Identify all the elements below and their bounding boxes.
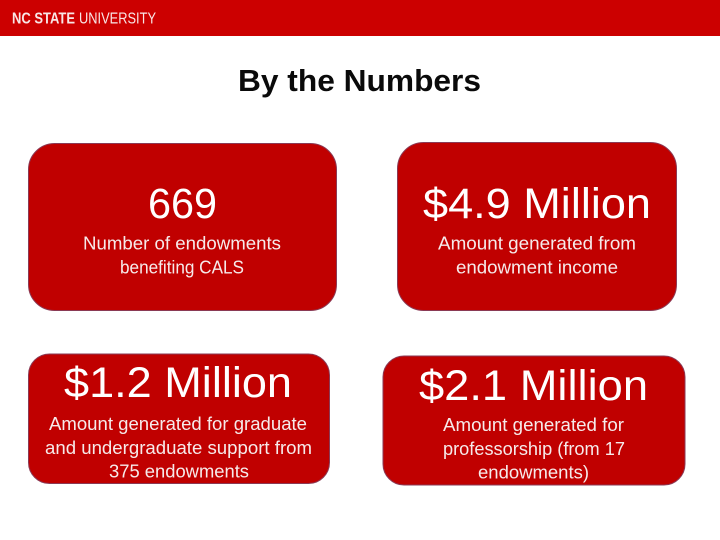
- statistic: $1.2 Million: $1.2 Million: [64, 359, 292, 407]
- description: endowment income: endowment income: [456, 258, 618, 278]
- description: professorship: professorship (from 17: [443, 439, 625, 459]
- panel: professorship: [383, 356, 685, 485]
- header banner: [0, 0, 720, 36]
- panel: graduate and undergraduate support: [28, 354, 330, 484]
- description: graduate support: Amount generated for graduate: [49, 414, 307, 434]
- description: professorship: [443, 415, 625, 482]
- description: professorship: endowments): [478, 462, 589, 482]
- description: endowment income: Amount generated from: [438, 234, 636, 254]
- logo wordmark: NC STATE: [12, 10, 75, 28]
- description: number of endowments: benefiting CALS: [120, 258, 244, 278]
- description: graduate support: 375 endowments: [109, 462, 249, 482]
- description: number of endowments: Number of endowments: [83, 234, 281, 254]
- description: professorship: Amount generated for: [443, 415, 624, 435]
- statistic: 669: 669: [148, 180, 217, 228]
- statistic: $2.1 Million: $2.1 Million: [419, 362, 648, 410]
- description: number of endowments: [83, 234, 281, 278]
- panel: endowment income: [398, 142, 676, 310]
- description: graduate support: and undergraduate support from: [45, 438, 312, 458]
- panel: number of endowments: [28, 144, 336, 310]
- description: graduate support: [45, 414, 312, 482]
- statistic: $4.9 Million: $4.9 Million: [423, 180, 651, 228]
- title: By the Numbers: [238, 64, 481, 98]
- description: endowment income: [438, 234, 636, 278]
- logo wordmark: UNIVERSITY: [79, 10, 156, 28]
